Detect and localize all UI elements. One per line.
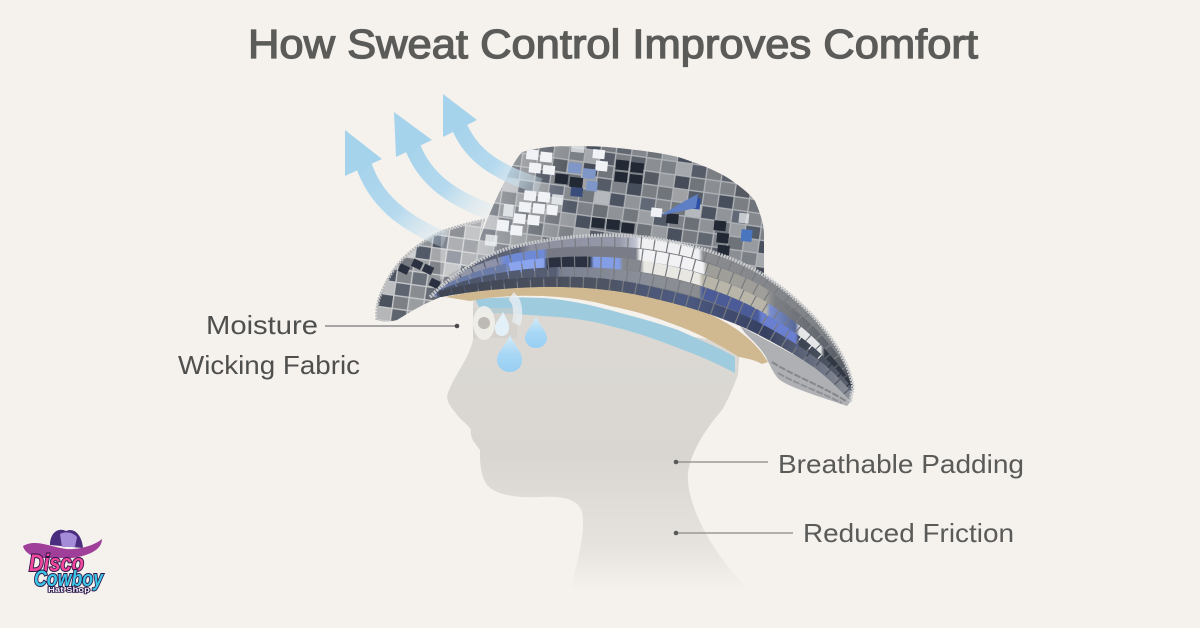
arrow 1 [345, 130, 445, 240]
label: reduced friction [674, 518, 1014, 548]
logo: Disco Cowboy Hat Shop: Hat Shop [48, 587, 90, 594]
arrow 3 [443, 94, 540, 186]
moisture wicking band [475, 297, 735, 373]
head silhouette [447, 300, 740, 568]
tan hat lining [445, 284, 768, 364]
label: moisture wicking fabric: Moisture [206, 310, 318, 340]
arrow 2 [394, 112, 490, 212]
hat brim piping [430, 235, 853, 402]
label: breathable padding: Breathable Padding [778, 449, 1024, 479]
hat [377, 136, 860, 406]
title: How Sweat Control Improves Comfort [248, 21, 979, 67]
hat brim tile rows [432, 235, 853, 400]
hat crown [472, 146, 764, 276]
arrows: rising heat [345, 94, 540, 240]
logo: Disco Cowboy Hat Shop [23, 530, 104, 594]
label: moisture wicking fabric: Wicking Fabric [178, 350, 360, 380]
logo: Disco Cowboy Hat Shop: Disco [29, 550, 84, 577]
label: moisture wicking fabric [178, 310, 459, 380]
hat back brim wing [377, 220, 485, 322]
label: reduced friction: Reduced Friction [803, 518, 1014, 548]
logo: Disco Cowboy Hat Shop: Cowboy [34, 566, 104, 591]
icon: sweat wick and drops [473, 296, 547, 372]
label: breathable padding [674, 449, 1024, 479]
hat brim underside [740, 326, 852, 406]
